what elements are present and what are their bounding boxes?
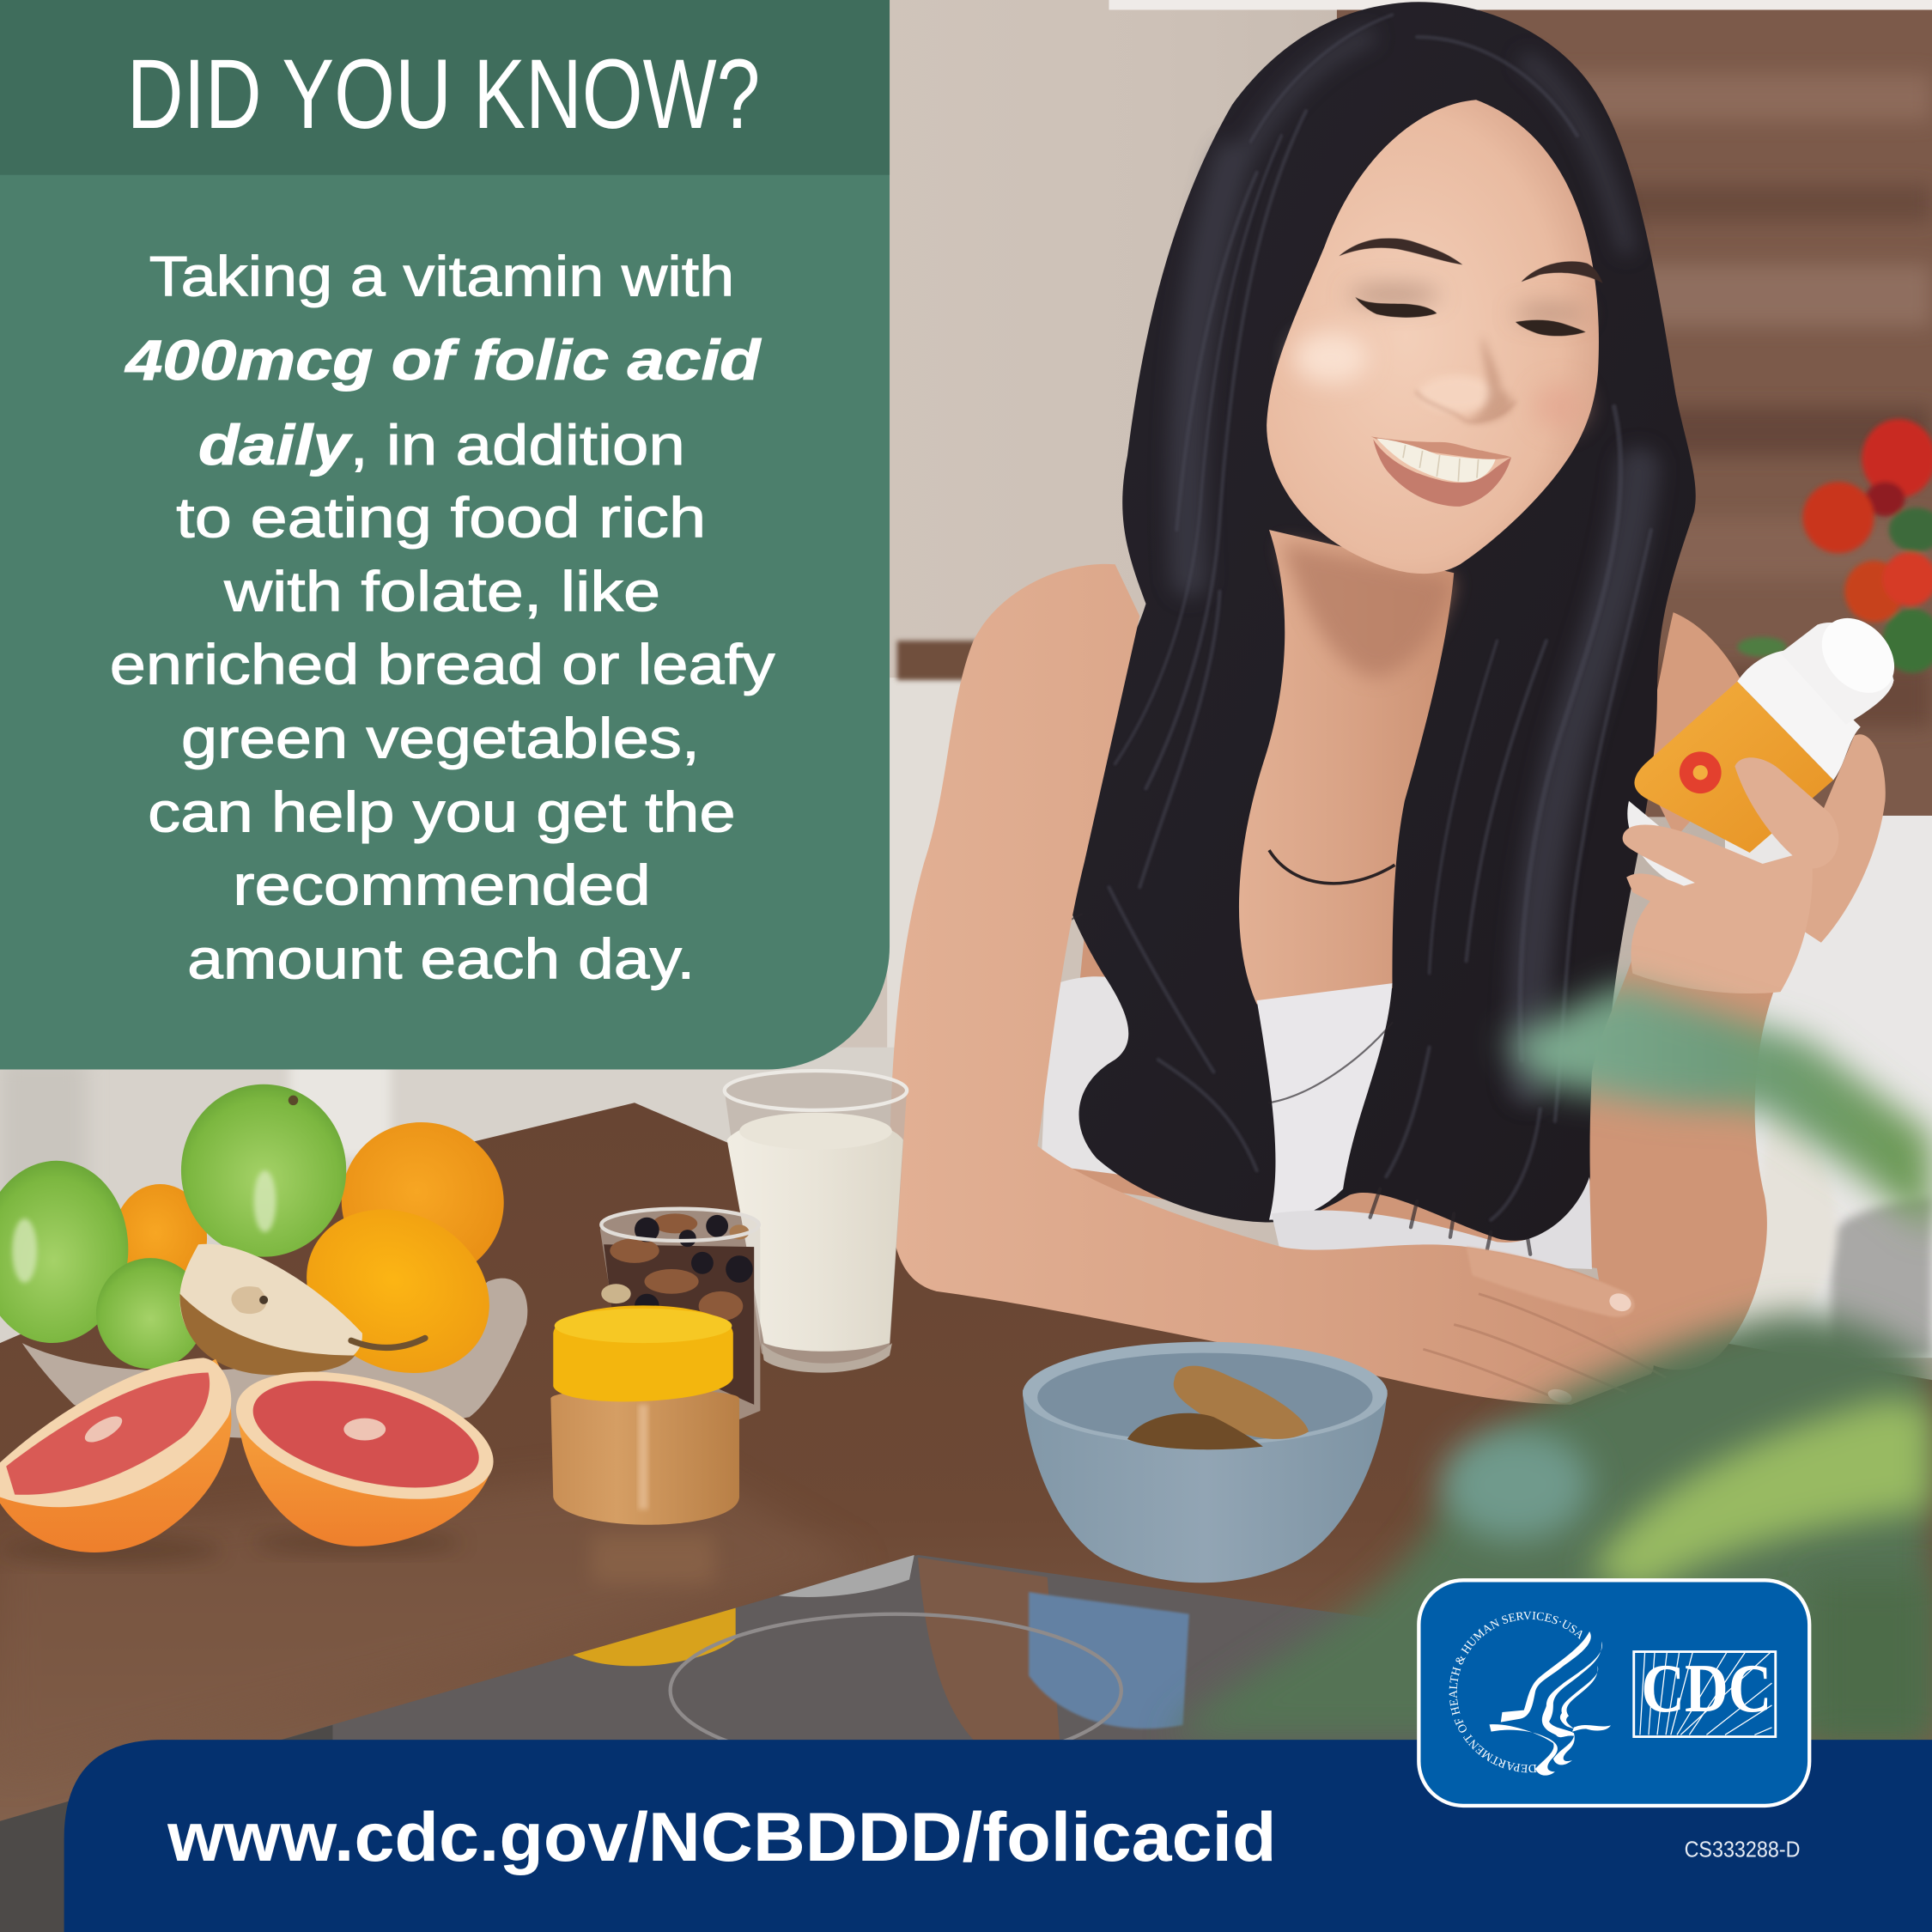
pear half [179,1244,425,1375]
table [0,1103,1932,1932]
rear finger [1774,734,1886,943]
peanut butter jar [550,1305,739,1525]
panel: did you know [0,0,890,1070]
orange, back left [113,1184,207,1292]
upper lip [1371,436,1511,459]
body copy: daily [198,413,353,477]
torso [1060,937,1601,1269]
left arm [890,564,1654,1405]
fruit bowl [0,1084,527,1438]
chest [1239,530,1454,1004]
right eye [1516,320,1586,336]
face [1267,100,1599,574]
body copy: recommended [233,853,651,916]
lower lip [1373,440,1511,507]
body copy: with folate, like [223,560,660,623]
green apple, top [181,1084,346,1257]
neck shadow [1281,542,1454,677]
panel header band [0,0,890,175]
left hand fingers [1423,1247,1666,1405]
white top, left part [1042,976,1183,1183]
green apple, left [0,1156,134,1348]
orange, back right [324,1104,521,1298]
body copy: enriched bread or leafy [110,632,775,696]
body copy: Taking a vitamin with [149,244,734,307]
right eyebrow [1522,261,1603,283]
heading: DID YOU KNOW? [127,39,760,149]
body copy: 400mcg of folic acid [124,328,762,392]
body copy: to eating food rich [176,486,706,550]
teeth [1376,439,1496,483]
body copy: green vegetables, [181,706,700,769]
hand holding the bottle [1623,757,1838,993]
vitamin bottle [1627,604,1909,887]
document code: CS333288-D [1685,1838,1800,1862]
white top [1257,983,1392,1220]
website url: www.cdc.gov/NCBDDD/folicacid [167,1799,1277,1876]
left half [0,1358,231,1552]
woman [890,2,1886,1405]
footer band [64,1740,1932,1932]
cheek and eyelid shading [1294,285,1586,429]
milk glass [725,1071,907,1373]
hair highlights [1109,15,1651,1220]
yellow orange [277,1178,518,1405]
body copy: amount each day. [187,927,695,990]
blue bowl with biscuits [1023,1342,1388,1583]
grapefruit halves [0,1349,507,1552]
body copy: can help you get the [148,781,736,844]
green apple, small [96,1258,204,1369]
body copy [110,244,775,990]
nose [1415,335,1516,422]
left eye [1355,297,1437,318]
right shoulder [1638,612,1762,838]
panel body [0,0,890,1070]
hhs seal: DEPARTMENT OF HEALTH & HUMAN SERVICES·USA [1449,1611,1583,1772]
right forearm [1590,937,1781,1370]
facial features [1294,238,1603,507]
glass cooktop reflection [0,1555,1540,1932]
wood wall with tomatoes [1337,9,1932,1358]
body copy: , in addition [350,413,685,477]
necklace [1269,850,1394,884]
hair wisps and tips [1004,914,1530,1255]
nuts and raisins glass [600,1208,760,1419]
hair mass [1052,2,1696,1241]
left eyebrow [1339,238,1462,264]
cdc logo: CDC [1641,1650,1771,1727]
right half [223,1349,507,1546]
logo badge [1417,1578,1812,1808]
foreground plant, blurred [1170,983,1932,1740]
